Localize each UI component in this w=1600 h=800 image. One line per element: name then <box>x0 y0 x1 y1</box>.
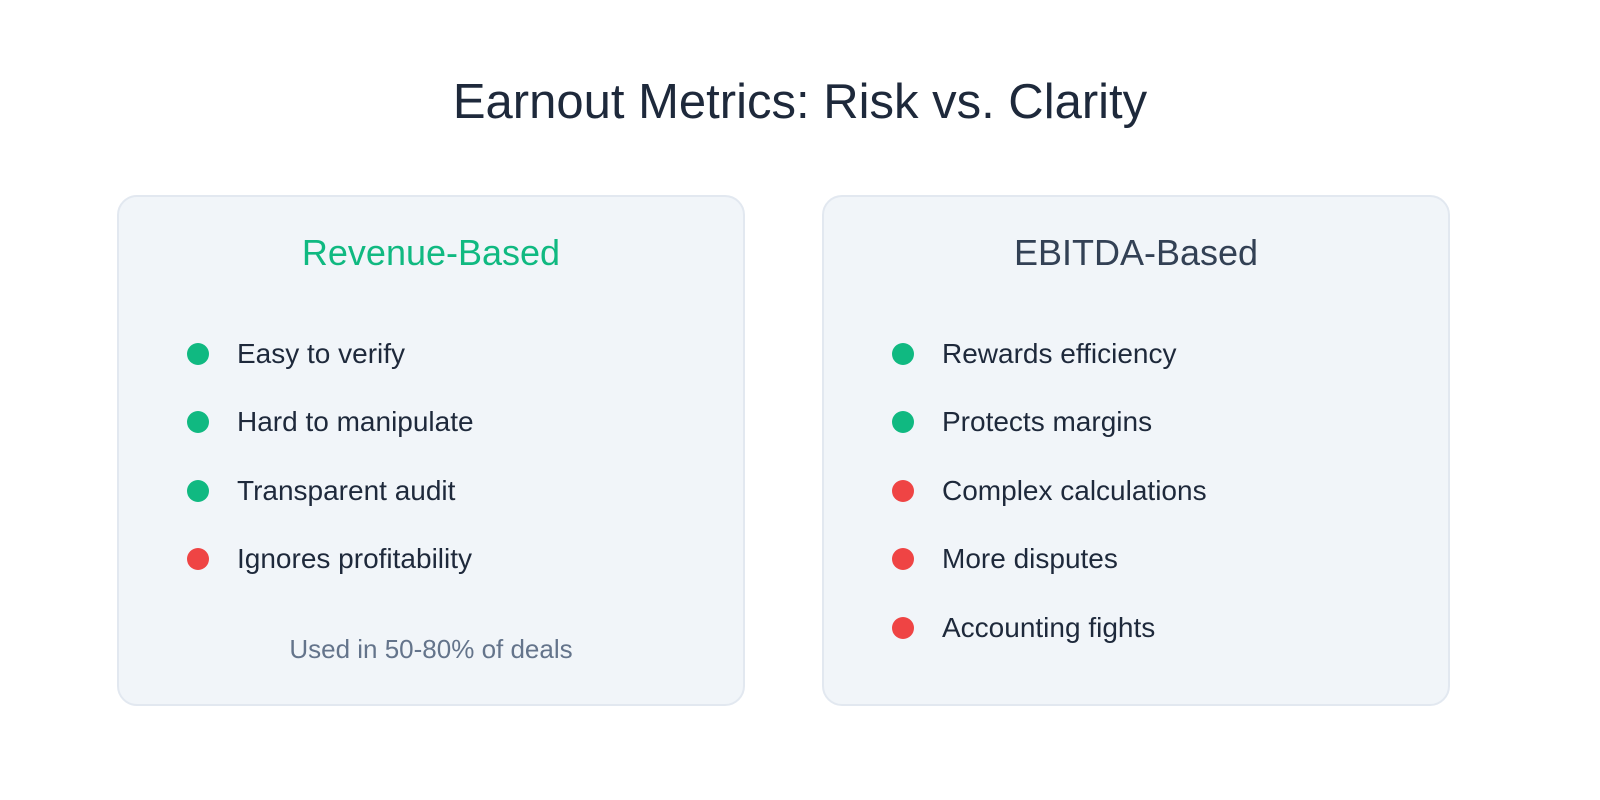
item: hard to manipulate: Hard to manipulate <box>237 406 474 437</box>
panel: revenue-based <box>117 195 745 706</box>
heading: revenue-based: Revenue-Based <box>302 232 560 273</box>
item: easy to verify: Easy to verify <box>237 338 405 369</box>
heading: ebitda-based: EBITDA-Based <box>1014 232 1258 273</box>
footnote: Used in 50-80% of deals <box>289 634 573 664</box>
panel: ebitda-based <box>822 195 1450 706</box>
item: accounting fights: Accounting fights <box>942 612 1155 643</box>
item: more disputes: More disputes <box>942 543 1118 574</box>
item: protects margins: Protects margins <box>942 406 1152 437</box>
title: Earnout Metrics: Risk vs. Clarity <box>453 75 1147 129</box>
item: complex calculations: Complex calculations <box>942 475 1207 506</box>
item: rewards efficiency: Rewards efficiency <box>942 338 1176 369</box>
item: ignores profitability: Ignores profitability <box>237 543 472 574</box>
item: transparent audit: Transparent audit <box>237 475 455 506</box>
